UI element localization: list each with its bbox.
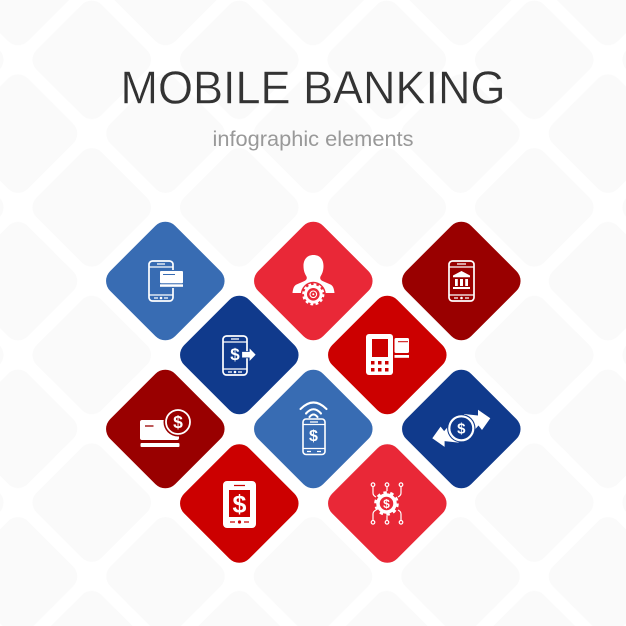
panel: money exchange [396,364,526,494]
icon: phone with bank [449,261,474,301]
title: MOBILE BANKING [120,61,506,113]
icon: fintech gear: $ [383,497,390,511]
panel: person with gear [248,216,378,346]
subtitle: infographic elements [212,128,414,151]
panel: phone with bank [396,216,526,346]
panel: fintech gear [322,438,452,569]
icon: phone contactless payment: $ [309,428,318,445]
panel: phone with dollar [174,438,304,569]
icon: card with coin: $ [173,412,183,432]
panel: card terminal [322,290,452,420]
panel: card with coin [100,364,230,494]
panel: phone contactless payment [248,364,378,494]
icon: card terminal [366,334,409,375]
panel: phone with card [100,216,230,346]
panel: phone sending money [174,290,304,420]
icon: phone with dollar: $ [233,490,247,518]
icon: phone sending money: $ [230,345,240,364]
icon: phone with card [149,261,184,301]
icon: money exchange: $ [457,421,466,438]
icon: person with gear [292,255,334,307]
